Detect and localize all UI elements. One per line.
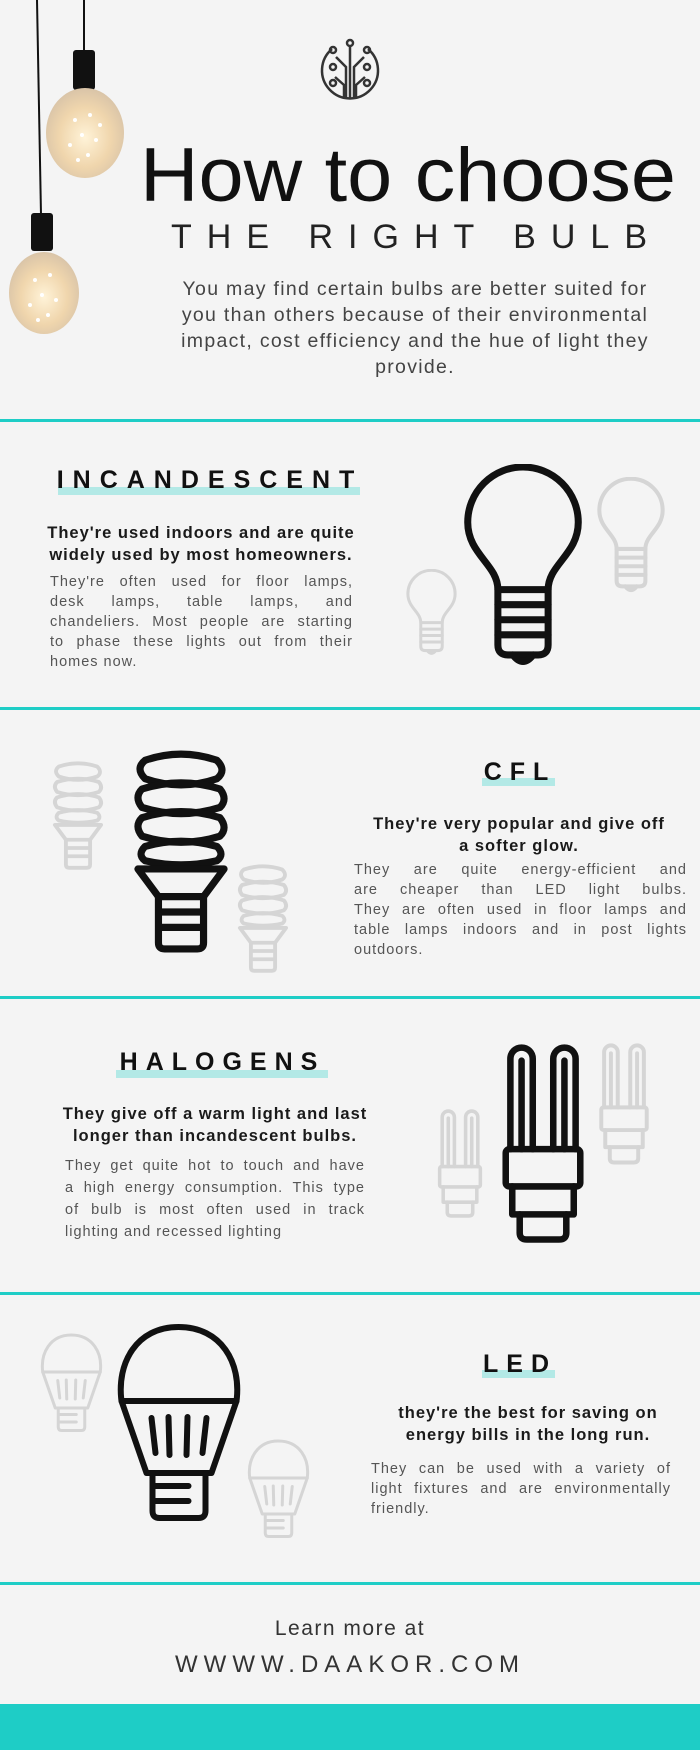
panel: CFL [53,750,687,973]
body text: to phase these lights out from their [50,634,353,650]
title: THE RIGHT BULB [171,218,647,256]
heading: HALOGENS [120,1048,325,1076]
subtitle [62,1105,367,1145]
footer text: WWWW.DAAKOR.COM [175,1651,525,1678]
hanging bulbs decoration [9,0,124,334]
icon: LED bulbs [40,1324,310,1538]
body text: lighting and recessed lighting [65,1224,282,1240]
body text [65,1158,365,1240]
icon: halogen bulbs [438,1044,649,1243]
body text: friendly. [371,1501,430,1517]
icon: incandescent bulbs [406,464,665,665]
intro text [181,278,649,378]
body text: They are often used in floor lamps and [354,902,687,918]
body text [354,862,687,958]
body text: outdoors. [354,942,423,958]
intro text: provide. [375,356,455,378]
subtitle [373,815,665,855]
body text: chandeliers. Most people are starting [50,614,353,630]
subtitle: energy bills in the long run. [406,1426,650,1444]
footer text: Learn more at [275,1617,425,1640]
body text [371,1461,671,1517]
intro text: You may find certain bulbs are better suited for [183,278,647,300]
subtitle [398,1404,658,1444]
highlight [482,1370,555,1378]
footer text [175,1617,525,1678]
panel: halogens [62,1044,649,1243]
subtitle: a softer glow. [459,837,579,855]
body text: are cheaper than LED light bulbs. [354,882,687,898]
subtitle: widely used by most homeowners. [49,546,353,564]
subtitle: they're the best for saving on [398,1404,658,1422]
subtitle: They're very popular and give off [373,815,665,833]
title [140,133,676,256]
panel: incandescent [47,464,665,670]
panel: LED [40,1324,671,1538]
highlight [482,778,555,786]
footer bar [0,1704,700,1750]
body text: of bulb is most often used in track [65,1202,365,1218]
body text: homes now. [50,654,137,670]
heading: INCANDESCENT [57,466,363,494]
logo icon [320,38,380,100]
body text: light fixtures and are environmentally [371,1481,671,1497]
highlight [116,1070,328,1078]
icon: CFL bulbs [53,750,288,973]
body text: They are quite energy-efficient and [354,862,687,878]
subtitle [47,524,355,564]
highlight [58,487,360,495]
heading: LED [483,1350,557,1378]
body text: table lamps indoors and in post lights [354,922,687,938]
heading: CFL [484,758,556,786]
body text: They're often used for floor lamps, [50,574,353,590]
subtitle: longer than incandescent bulbs. [73,1127,357,1145]
body text: a high energy consumption. This type [65,1180,365,1196]
intro text: you than others because of their environmental [182,304,648,326]
subtitle: They give off a warm light and last [63,1105,367,1123]
intro text: impact, cost efficiency and the hue of light they [181,330,649,352]
body text: desk lamps, table lamps, and [50,594,353,610]
body text: They can be used with a variety of [371,1461,671,1477]
body text [50,574,353,670]
title: How to choose [140,133,676,218]
subtitle: They're used indoors and are quite [47,524,355,542]
body text: They get quite hot to touch and have [65,1158,365,1174]
